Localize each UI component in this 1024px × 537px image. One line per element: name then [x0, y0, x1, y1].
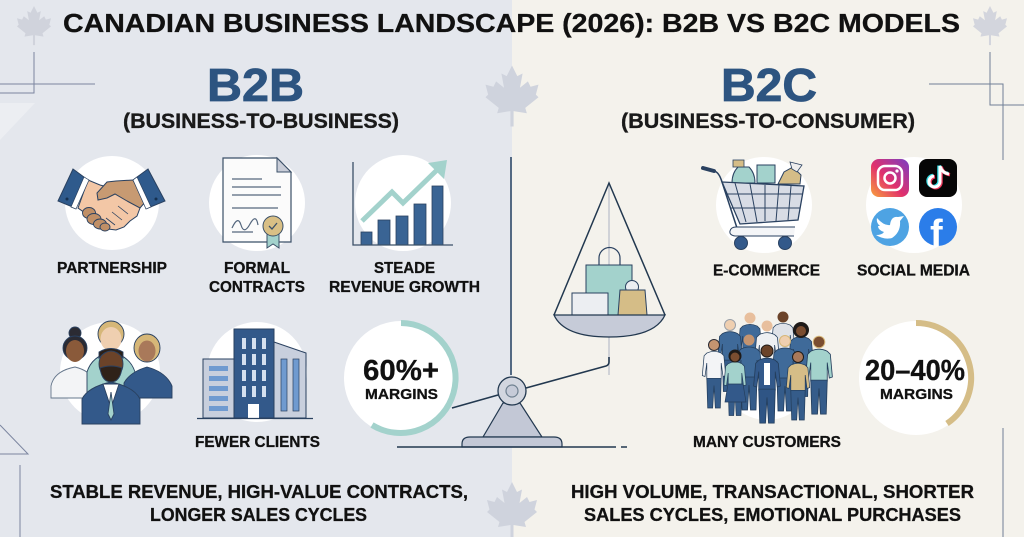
- icon: formal contract document: [209, 155, 305, 251]
- icon: balance scale: [397, 157, 665, 447]
- icon: maple leaf top right: [973, 6, 1007, 45]
- text block: B2B summary: LONGER SALES CYCLES: [150, 505, 367, 525]
- label: fewer clients: FEWER CLIENTS: [195, 434, 320, 451]
- chart: 60%+ margins ring: [344, 321, 458, 435]
- label: e-commerce: E-COMMERCE: [713, 262, 820, 280]
- icon: maple leaf bottom: [487, 482, 537, 537]
- icon: shopping cart: [703, 157, 812, 253]
- chart: 60%+ margins ring: MARGINS: [365, 386, 438, 403]
- label: formal contracts: [209, 260, 305, 296]
- label: steade revenue growth: STEADE: [374, 260, 435, 277]
- heading: B2C: (BUSINESS-TO-CONSUMER): [621, 110, 915, 133]
- icon: maple leaf top left: [17, 6, 51, 45]
- label: many customers: MANY CUSTOMERS: [693, 434, 841, 451]
- label: steade revenue growth: [329, 260, 480, 296]
- icon: twitter: [871, 208, 909, 246]
- label: steade revenue growth: REVENUE GROWTH: [329, 279, 480, 296]
- chart: 20-40% margins ring: [859, 321, 973, 435]
- label: partnership: PARTNERSHIP: [57, 260, 167, 277]
- heading: B2B: (BUSINESS-TO-BUSINESS): [123, 110, 399, 133]
- label: formal contracts: FORMAL: [224, 260, 290, 277]
- heading: B2B: B2B: [207, 59, 304, 111]
- title: CANADIAN BUSINESS LANDSCAPE (2026): B2B VS B2C MODELS: [63, 8, 960, 38]
- heading: B2C: B2C: [721, 59, 817, 111]
- icon: office buildings: [197, 322, 313, 422]
- icon: business people group: [51, 321, 172, 424]
- text block: B2C summary: HIGH VOLUME, TRANSACTIONAL, SHORTER: [571, 482, 974, 502]
- icon: social media logos: [866, 157, 962, 255]
- icon: maple leaf centre: [486, 66, 538, 126]
- background: B2B side: [0, 0, 512, 537]
- chart: 60%+ margins ring: 60%+: [363, 355, 439, 387]
- heading: B2C: [621, 59, 915, 133]
- chart: 20-40% margins ring: 20–40%: [865, 355, 965, 387]
- heading: B2B: [123, 59, 399, 133]
- text block: B2B summary: [50, 482, 468, 525]
- text block: B2B summary: STABLE REVENUE, HIGH-VALUE CONTRACTS,: [50, 482, 468, 502]
- icon: tiktok: [919, 159, 957, 197]
- chart: 20-40% margins ring: MARGINS: [880, 386, 953, 403]
- text block: B2C summary: [571, 482, 974, 525]
- icon: partnership handshake: [58, 156, 165, 250]
- decorative light triangle: [0, 103, 35, 140]
- text block: B2C summary: SALES CYCLES, EMOTIONAL PURCHASES: [584, 505, 961, 525]
- label: formal contracts: CONTRACTS: [209, 279, 305, 296]
- icon: crowd of customers: [702, 312, 832, 423]
- icon: instagram: [871, 159, 909, 197]
- icon: revenue growth chart: [353, 155, 453, 251]
- background: B2C side: [512, 0, 1024, 537]
- icon: facebook: f: [930, 213, 943, 255]
- label: social media: SOCIAL MEDIA: [857, 262, 970, 280]
